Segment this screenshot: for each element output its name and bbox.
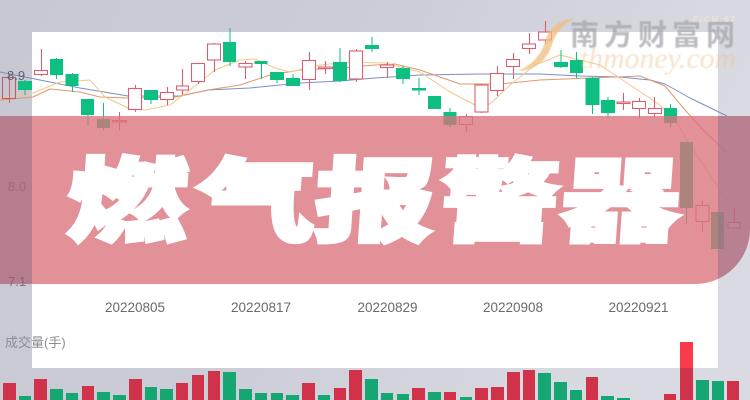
watermark — [518, 15, 736, 75]
watermark url: thmoney.com — [580, 42, 736, 75]
volume label: 成交量(手) — [5, 335, 66, 350]
falling candles (solid green) — [18, 28, 724, 249]
volume bars — [3, 342, 739, 400]
title: 燃气报警器 — [64, 151, 685, 254]
date axis labels: 20220805 — [105, 300, 165, 315]
date axis labels: 20220829 — [357, 300, 418, 315]
watermark chinese name: 南方财富网 — [570, 19, 735, 52]
rising candles (hollow red) — [2, 21, 740, 232]
tallest volume bar in panel — [680, 342, 693, 368]
date axis labels — [105, 300, 669, 315]
red volume bars — [3, 368, 739, 400]
axis label 7.1: 7.1 — [8, 274, 26, 289]
chart: candlesticks and moving averages — [0, 21, 740, 249]
date axis labels: 20220908 — [483, 300, 543, 315]
band: darker pink outside panel, right — [718, 116, 750, 279]
moving average lines — [0, 55, 727, 200]
green volume bars — [19, 372, 724, 400]
axis label 8.9: 8.9 — [7, 68, 25, 83]
band: translucent pink over panel — [0, 116, 750, 284]
date axis labels: 20220921 — [608, 300, 669, 315]
band: darker pink outside panel, left — [0, 116, 32, 284]
axis label 8.0: 8.0 — [8, 179, 26, 194]
date axis labels: 20220817 — [231, 300, 291, 315]
panel: white chart area — [32, 32, 718, 368]
logo swoosh — [518, 18, 575, 71]
watermark small code: FICM 67 — [693, 15, 736, 24]
